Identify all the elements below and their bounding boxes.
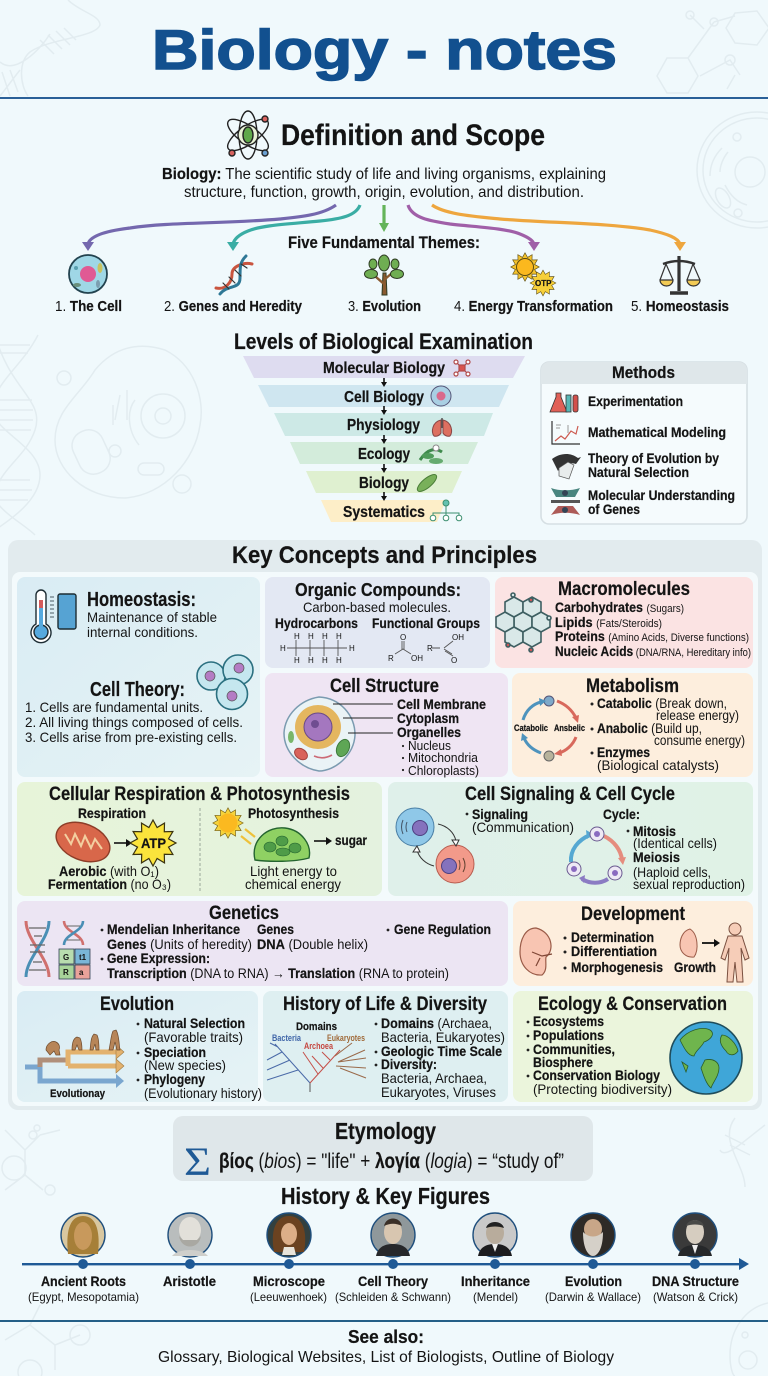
portrait: ancient roots: [61, 1213, 105, 1257]
panel: methods: [541, 362, 747, 524]
text: development list: Morphogenesis: [571, 959, 663, 975]
title: Biology - notes: [152, 18, 617, 81]
icon: punnett square: R: [63, 968, 69, 977]
diagram: hydrocarbon formula: H: [308, 656, 314, 665]
text: development list: Differentiation: [571, 943, 657, 959]
card: genetics: Genetics: [209, 903, 279, 924]
text: experimentation: Experimentation: [588, 393, 683, 409]
text: cell parts: Cell Membrane: [397, 696, 486, 712]
icon: ATP star: [130, 820, 176, 866]
card: organic compounds: Carbon-based molecules.: [303, 599, 451, 615]
text: light energy: [245, 863, 341, 892]
icon: DNA helices: [26, 921, 83, 977]
icon: cells: [197, 655, 253, 710]
portrait: inheritance: [473, 1213, 517, 1257]
text: cell parts: Mitochondria: [408, 751, 478, 765]
text: cell parts: [397, 696, 486, 778]
theme labels: 5. Homeostasis: [631, 298, 729, 315]
icon: thermometer: [31, 590, 76, 643]
text: aerobic and fermentation: Fermentation (no O₃): [48, 876, 171, 892]
icon: punnett square: t1: [79, 953, 87, 962]
card: organic compounds: Functional Groups: [372, 615, 480, 631]
icon: tree: [364, 255, 404, 295]
diagram: functional groups: O: [451, 656, 457, 665]
funnel chart: Systematics: [343, 504, 425, 521]
icon: book: [552, 454, 581, 479]
text: history list: Diversity:: [381, 1056, 437, 1072]
diagram: phylogenetic tree: Domains: [296, 1021, 337, 1033]
arrows to themes: [82, 205, 686, 251]
diagram: functional groups: OH: [452, 633, 464, 642]
card: macromolecules: Macromolecules: [558, 579, 690, 600]
text: evolution list: (Favorable traits): [144, 1029, 243, 1045]
diagram: phylogenetic tree: [267, 1021, 366, 1092]
icon: balance scale: [660, 256, 700, 293]
card: evolution: [17, 991, 262, 1102]
card: cellular respiration and photosynthesis: Photosynthesis: [248, 805, 339, 821]
card: organic compounds: Hydrocarbons: [275, 615, 358, 631]
text: cell theory: [25, 679, 243, 745]
timeline labels: [28, 1273, 739, 1304]
diagram: phylogenetic tree: Eukaryotes: [327, 1033, 365, 1043]
section: history and key figures: [22, 1183, 749, 1304]
card: homeostasis and cell theory: [17, 577, 260, 777]
icon: punnett square: a: [79, 968, 84, 977]
text: molecular understanding: of Genes: [588, 501, 640, 517]
card: metabolism: [512, 673, 753, 777]
text: ecology list: Communities,: [533, 1041, 615, 1057]
card: history of life and diversity: History of Life & Diversity: [283, 994, 487, 1015]
text: greek roots: βίος (bios) = "life" + λογία (logia) = “study of”: [219, 1150, 564, 1173]
icon: genes: [551, 488, 580, 515]
text: theory of evolution: Theory of Evolution by: [588, 450, 719, 466]
theme labels: 4. Energy Transformation: [454, 298, 613, 315]
text: aerobic and fermentation: [48, 863, 171, 892]
text: signaling: (Communication): [472, 819, 574, 835]
text: genetics details: Mendelian Inheritance: [107, 922, 240, 937]
text: evolution list: Speciation: [144, 1044, 206, 1060]
text: homeostasis: Homeostasis:: [87, 589, 196, 611]
arrow: to ATP: [114, 839, 132, 847]
icon: sun: [213, 808, 255, 844]
text: ecology list: (Protecting biodiversity): [533, 1081, 672, 1097]
timeline labels: (Leeuwenhoek): [250, 1290, 327, 1304]
text: light energy: chemical energy: [245, 876, 341, 892]
icon: sigma: Σ: [184, 1139, 211, 1184]
text: genetics details: [101, 922, 491, 981]
footer: see also: [158, 1327, 614, 1366]
timeline labels: DNA Structure: [652, 1273, 739, 1289]
text: signaling: Signaling: [472, 806, 528, 822]
icon: lab glassware: [550, 393, 578, 412]
text: cell parts: Organelles: [397, 724, 461, 740]
timeline labels: (Watson & Crick): [653, 1290, 738, 1304]
theme labels: 2. Genes and Heredity: [164, 298, 303, 315]
text: ecology list: Ecosystems: [533, 1013, 604, 1029]
diagram: evolutionary tree: Evolutionay: [50, 1088, 106, 1100]
timeline labels: (Mendel): [473, 1290, 518, 1304]
theme labels: 1. The Cell: [55, 298, 122, 315]
text: homeostasis: Maintenance of stable: [87, 609, 217, 625]
text: theory of evolution: [588, 450, 719, 480]
text: metabolism list: Catabolic (Break down,: [597, 695, 727, 711]
text: metabolism list: [590, 695, 745, 773]
subheading: five fundamental themes: Five Fundamental Themes:: [288, 233, 480, 252]
text: cell theory: 2. All living things composed of cells.: [25, 714, 243, 730]
diagram: hydrocarbon formula: H: [294, 632, 300, 641]
icon: chloroplast: [254, 828, 310, 861]
heading: key concepts: Key Concepts and Principles: [232, 542, 537, 569]
text: cell theory: Cell Theory:: [90, 679, 185, 701]
funnel chart: Physiology: [347, 417, 420, 434]
arrow and label: sugar: [314, 832, 367, 848]
diagram: cell: [284, 697, 393, 771]
icon: ATP star: ATP: [141, 835, 166, 851]
diagram: phylogenetic tree: Bacteria: [272, 1033, 302, 1043]
icon: the cell: [69, 255, 107, 293]
text: history list: Bacteria, Eukaryotes): [381, 1029, 505, 1045]
text: cell theory: 3. Cells arise from pre-existing cells.: [25, 729, 237, 745]
card: history of life and diversity: [263, 991, 508, 1102]
diagram: functional groups: O: [400, 633, 406, 642]
timeline labels: Aristotle: [163, 1273, 216, 1289]
text: genetics details: Genes (Units of heredity): [107, 937, 252, 952]
text: cell parts: Chloroplasts): [408, 764, 479, 778]
diagram: signaling cells: [396, 808, 474, 883]
card: cell signaling and cell cycle: [388, 782, 753, 896]
card: development: [513, 901, 753, 986]
funnel chart: Cell Biology: [344, 389, 424, 406]
icon: growth arrow and human: [680, 923, 749, 982]
text: macromolecule list: Nucleic Acids (DNA/RNA, Hereditary info): [555, 643, 751, 659]
text: metabolism list: consume energy): [654, 732, 745, 748]
icon: sun and ATP: [511, 253, 556, 296]
text: homeostasis: internal conditions.: [87, 624, 198, 640]
text: homeostasis: [87, 589, 217, 640]
card: cellular respiration and photosynthesis: [17, 782, 382, 896]
diagram: functional groups: R: [388, 654, 394, 663]
timeline labels: (Schleiden & Schwann): [335, 1290, 451, 1304]
text: metabolism list: Anabolic (Build up,: [597, 720, 702, 736]
diagram: phylogenetic tree: Archoea: [304, 1041, 334, 1051]
card: development: Development: [581, 904, 686, 925]
portrait: microscope: [267, 1213, 311, 1257]
section: levels of biological examination: [234, 329, 747, 524]
heading: history: History & Key Figures: [281, 1183, 490, 1209]
text: ecology list: Populations: [533, 1027, 604, 1043]
text: development list: Growth: [674, 959, 716, 975]
text: evolution list: [137, 1015, 262, 1101]
text: ecology list: Conservation Biology: [533, 1067, 660, 1083]
text: light energy: Light energy to: [250, 863, 337, 879]
diagram: hydrocarbon formula: H: [322, 632, 328, 641]
text: mathematical modeling: Mathematical Modeling: [588, 424, 726, 440]
icon: punnett square: [59, 949, 90, 979]
diagram: hydrocarbon formula: H: [308, 632, 314, 641]
diagram: evolutionary tree: [25, 1030, 124, 1100]
text: metabolism list: release energy): [656, 707, 739, 723]
diagram: hydrocarbon formula: H: [280, 644, 286, 653]
timeline labels: (Egypt, Mesopotamia): [28, 1290, 139, 1304]
text: mitosis and meiosis: (Identical cells): [633, 835, 717, 851]
icon: chart: [552, 421, 580, 444]
timeline labels: Ancient Roots: [41, 1273, 126, 1289]
text: mitosis and meiosis: [627, 823, 745, 892]
panel: etymology: Etymology: [335, 1118, 436, 1144]
text: genetics details: Genes: [257, 922, 294, 937]
diagram: functional groups: R: [427, 644, 433, 653]
text: metabolism list: Enzymes: [597, 744, 650, 760]
text: evolution list: Natural Selection: [144, 1015, 245, 1031]
card: organic compounds: Organic Compounds:: [295, 580, 461, 600]
panel: methods: Methods: [612, 363, 675, 382]
card: cellular respiration and photosynthesis: Respiration: [78, 805, 146, 821]
text: macromolecule list: Proteins (Amino Acids, Diverse functions): [555, 628, 749, 644]
text: history list: [375, 1015, 505, 1100]
text: development list: [564, 929, 716, 975]
diagram: hydrocarbon formula: H: [336, 632, 342, 641]
diagram: metabolic cycle: [514, 696, 585, 761]
text: aerobic and fermentation: Aerobic (with O₁): [59, 863, 159, 879]
card: cell signaling and cell cycle: Cycle:: [603, 806, 640, 822]
text: biology definition: structure, function, growth, origin, evolution, and distribution.: [184, 184, 584, 201]
panel: etymology: [173, 1116, 593, 1184]
icon: DNA: [216, 256, 252, 294]
text: history list: Bacteria, Archaea,: [381, 1070, 487, 1086]
funnel chart: Molecular Biology: [323, 360, 445, 377]
text: metabolism list: (Biological catalysts): [597, 757, 719, 773]
text: macromolecule list: [555, 599, 751, 659]
text: biology definition: Biology: The scientific study of life and living organisms, explaining: [162, 166, 606, 183]
text: evolution list: Phylogeny: [144, 1071, 205, 1087]
timeline labels: Cell Theory: [358, 1273, 428, 1289]
funnel chart: Ecology: [358, 446, 410, 463]
card: ecology and conservation: [513, 991, 753, 1102]
timeline labels: Microscope: [253, 1273, 325, 1289]
diagram: hydrocarbon formula: [280, 632, 355, 665]
card: cell signaling and cell cycle: Cell Signaling & Cell Cycle: [465, 784, 675, 805]
icon: punnett square: G: [63, 953, 69, 962]
diagram: hydrocarbon formula: H: [349, 644, 355, 653]
timeline labels: (Darwin & Wallace): [545, 1290, 641, 1304]
card: cellular respiration and photosynthesis: Cellular Respiration & Photosynthesis: [49, 784, 350, 805]
text: genetics details: Transcription (DNA to RNA) → Translation (RNA to protein): [107, 966, 449, 981]
text: cell theory: 1. Cells are fundamental units.: [25, 699, 203, 715]
text: development list: Determination: [571, 929, 654, 945]
timeline labels: Evolution: [565, 1273, 622, 1289]
icon: globe: [670, 1022, 742, 1094]
timeline dots: [78, 1259, 700, 1269]
diagram: metabolic cycle: Catabolic: [514, 723, 548, 733]
funnel chart: Biology: [359, 475, 409, 492]
diagram: hydrocarbon formula: H: [322, 656, 328, 665]
text: signaling: [466, 806, 574, 835]
icon: molecule: [496, 593, 551, 652]
icon: embryo: [520, 928, 552, 975]
text: genetics details: DNA (Double helix): [257, 937, 368, 952]
portrait: DNA structure: [673, 1213, 717, 1257]
text: genetics details: Gene Expression:: [107, 951, 210, 966]
theme labels: 3. Evolution: [348, 298, 421, 315]
theme labels: [55, 298, 729, 315]
portrait: cell theory: [371, 1213, 415, 1257]
timeline labels: Inheritance: [461, 1273, 530, 1289]
card: ecology and conservation: Ecology & Conservation: [538, 994, 727, 1015]
text: mitosis and meiosis: (Haploid cells,: [633, 864, 711, 880]
text: history list: Geologic Time Scale: [381, 1043, 502, 1059]
section: definition and scope: [55, 111, 729, 315]
text: cell parts: Nucleus: [408, 739, 451, 753]
arrow and label: sugar: sugar: [335, 832, 367, 848]
diagram: functional groups: [388, 633, 464, 665]
text: macromolecule list: Lipids (Fats/Steroids): [555, 614, 662, 630]
heading: levels: Levels of Biological Examination: [234, 329, 533, 354]
text: mitosis and meiosis: sexual reproduction): [633, 876, 745, 892]
text: evolution list: (Evolutionary history): [144, 1085, 262, 1101]
text: macromolecule list: Carbohydrates (Sugars): [555, 599, 684, 615]
icon: sun and ATP: OTP: [535, 279, 552, 288]
text: cell parts: Cytoplasm: [397, 710, 459, 726]
footer: see also: See also:: [348, 1327, 424, 1347]
text: mitosis and meiosis: Mitosis: [633, 823, 676, 839]
text: genetics details: Gene Regulation: [394, 922, 491, 937]
text: evolution list: (New species): [144, 1057, 226, 1073]
card: macromolecules: [495, 577, 753, 668]
funnel chart: [243, 356, 525, 522]
text: ecology list: [527, 1013, 672, 1097]
panel: key concepts and principles: [8, 540, 762, 1110]
text: molecular understanding: [588, 487, 735, 517]
footer: see also: Glossary, Biological Websites, List of Biologists, Outline of Biology: [158, 1349, 614, 1366]
diagram: hydrocarbon formula: H: [294, 656, 300, 665]
text: theory of evolution: Natural Selection: [588, 464, 689, 480]
diagram: functional groups: OH: [411, 654, 423, 663]
text: molecular understanding: Molecular Understanding: [588, 487, 735, 503]
portrait: evolution: [571, 1213, 615, 1257]
card: metabolism: Metabolism: [586, 676, 679, 697]
icon: atom: [223, 111, 273, 159]
icon: mitochondrion: [50, 815, 116, 869]
diagram: cell cycle: [567, 827, 626, 883]
portrait: aristotle: [168, 1213, 212, 1257]
card: cell structure: [265, 673, 508, 778]
text: history list: Eukaryotes, Viruses: [381, 1084, 496, 1100]
card: evolution: Evolution: [100, 994, 174, 1015]
diagram: hydrocarbon formula: H: [336, 656, 342, 665]
text: biology definition: [162, 166, 606, 201]
card: organic compounds: [265, 577, 490, 668]
arrow: timeline: [22, 1258, 749, 1270]
text: history list: Domains (Archaea,: [381, 1015, 492, 1031]
heading: definition and scope: Definition and Scope: [281, 119, 545, 152]
card: genetics: [17, 901, 508, 986]
card: cell structure: Cell Structure: [330, 676, 439, 697]
text: ecology list: Biosphere: [533, 1054, 593, 1070]
diagram: metabolic cycle: Ansbelic: [554, 723, 585, 733]
text: mitosis and meiosis: Meiosis: [633, 849, 680, 865]
